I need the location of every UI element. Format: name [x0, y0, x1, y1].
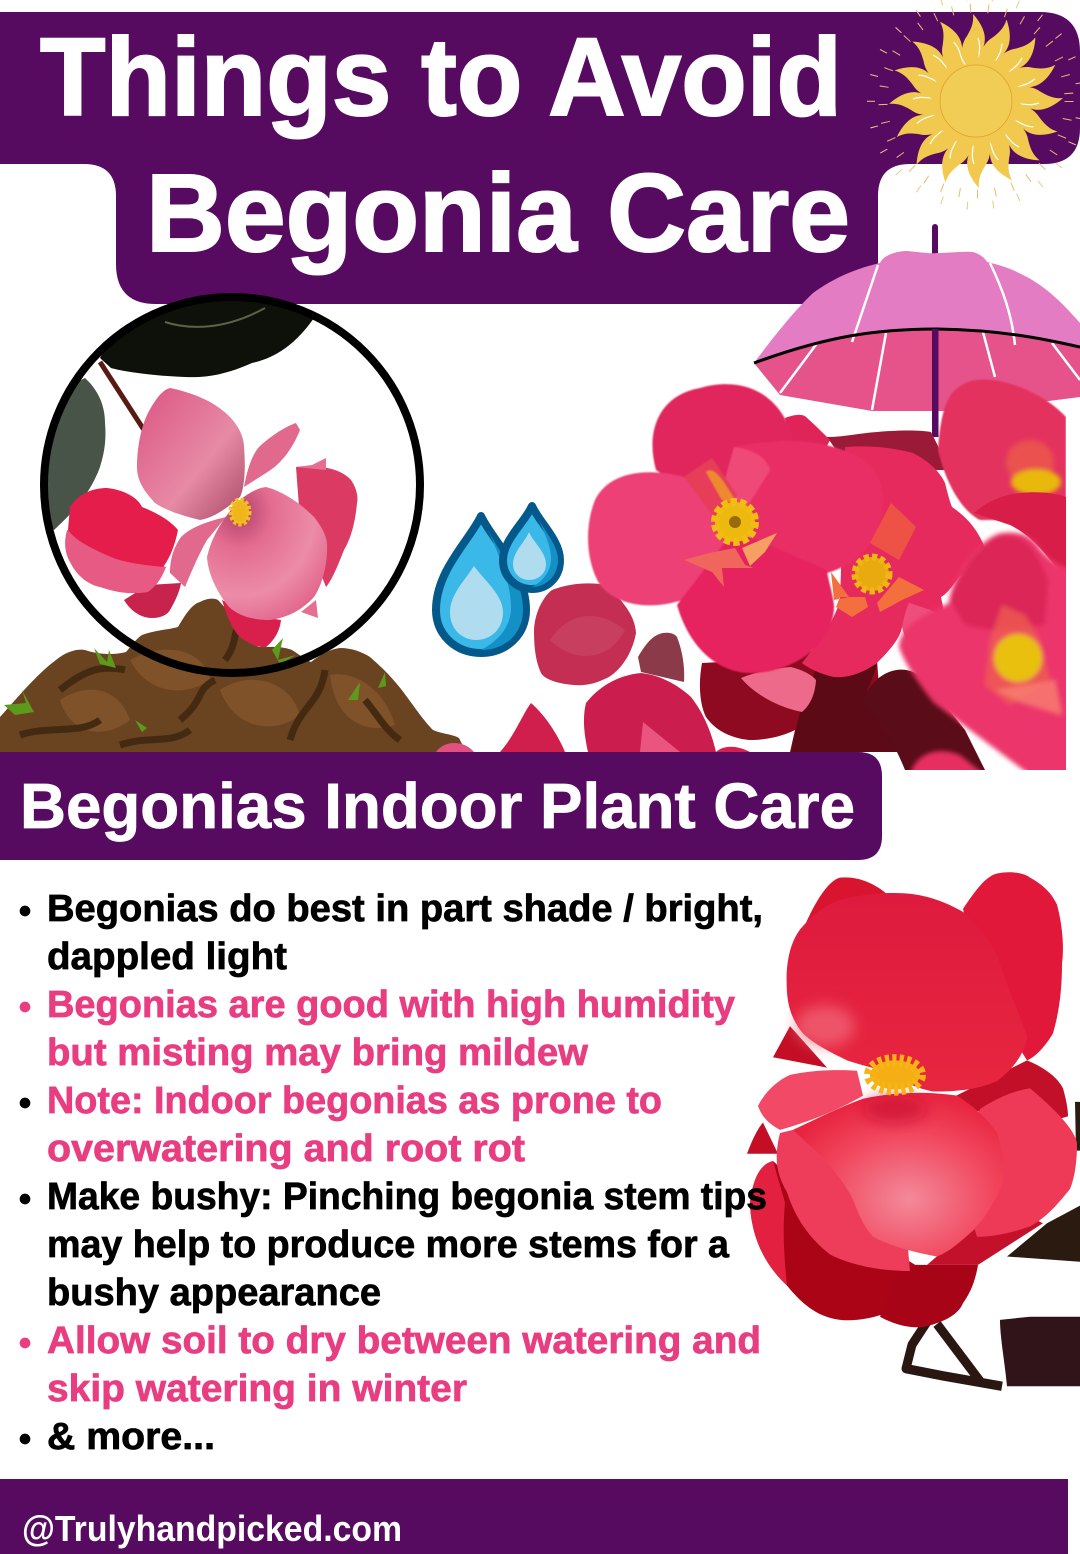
left small petal: [758, 1070, 863, 1130]
stem and dark leaves: [906, 1102, 1080, 1386]
main red top petal: [787, 893, 1027, 1091]
title line 2: Begonia Care: [146, 152, 850, 275]
blurred top-right flower: [938, 379, 1066, 520]
bullet: soil: skip watering in winter: [47, 1368, 467, 1410]
bullet: soil: [20, 1320, 761, 1410]
bullet: humidity: but misting may bring mildew: [47, 1032, 588, 1074]
back petal and shadowed band: [785, 415, 950, 470]
dark stems and bracts: [700, 650, 985, 770]
right and left lower petals: [777, 1088, 1077, 1271]
front petal: [793, 1093, 1004, 1257]
second flower petals: [802, 446, 986, 677]
illustration: soil mound: [0, 599, 466, 752]
bullet: overwatering: overwatering and root rot: [47, 1128, 525, 1170]
footer bar: @Trulyhandpicked.com: [22, 1508, 402, 1549]
photo: pink begonia cluster: [436, 379, 1070, 775]
photo: red begonia: [747, 872, 1080, 1386]
icon: sun: [871, 0, 1080, 206]
bullet: pinching: [20, 1176, 767, 1314]
flower: red side petals: [65, 458, 357, 647]
bullet: pinching: bushy appearance: [47, 1272, 381, 1314]
bullet: humidity: Begonias are good with high humidity: [47, 984, 735, 1026]
bullet: pinching: Make bushy: Pinching begonia stem tips: [47, 1176, 767, 1218]
photo: begonia in circle on soil: [0, 288, 466, 752]
bullet: light: dappled light: [47, 936, 287, 978]
panel heading: begonias indoor plant care: Begonias Indoor Plant Care: [20, 770, 855, 842]
footer bar: [0, 1479, 1068, 1554]
main pink flower petals: [586, 383, 845, 674]
bullet: humidity: [20, 984, 735, 1074]
panel heading: begonias indoor plant care: [0, 752, 882, 860]
bullet: light: [20, 888, 763, 978]
bullet: soil: Allow soil to dry between watering and: [47, 1320, 761, 1362]
bullet: pinching: may help to produce more stems for a: [47, 1224, 730, 1266]
shadow under stamens: [863, 1096, 927, 1123]
large drop: [436, 516, 526, 653]
bullet: light: Begonias do best in part shade / bright,: [47, 888, 763, 930]
second flower stamens and sepals: [831, 503, 924, 617]
bullet: more: & more...: [47, 1416, 215, 1458]
flower: pink petals: [137, 388, 327, 620]
blurred lower-right flower: [899, 532, 1070, 775]
circle outline: [44, 297, 420, 673]
bullet: overwatering: [20, 1080, 662, 1170]
stamens of main flower: [715, 502, 755, 542]
bullet: overwatering: Note: Indoor begonias as prone to: [47, 1080, 662, 1122]
small drop: [503, 506, 560, 589]
illustration: leaf and stem: [48, 301, 313, 530]
back and shadow petals: [747, 872, 1068, 1327]
main flower orange sepals: [684, 533, 777, 587]
title line 1: Things to Avoid: [40, 16, 842, 139]
bullet list: [20, 888, 767, 1458]
icon: umbrella: [754, 224, 1080, 437]
blurred red petal: [974, 492, 1066, 575]
loose lower petals: [436, 583, 750, 752]
yellow stamens: [870, 1060, 920, 1089]
shimmer on top petal: [795, 1005, 855, 1047]
flower: yellow stamens: [231, 500, 249, 524]
icon: water drops: [436, 506, 560, 653]
title banner: [0, 12, 1080, 304]
